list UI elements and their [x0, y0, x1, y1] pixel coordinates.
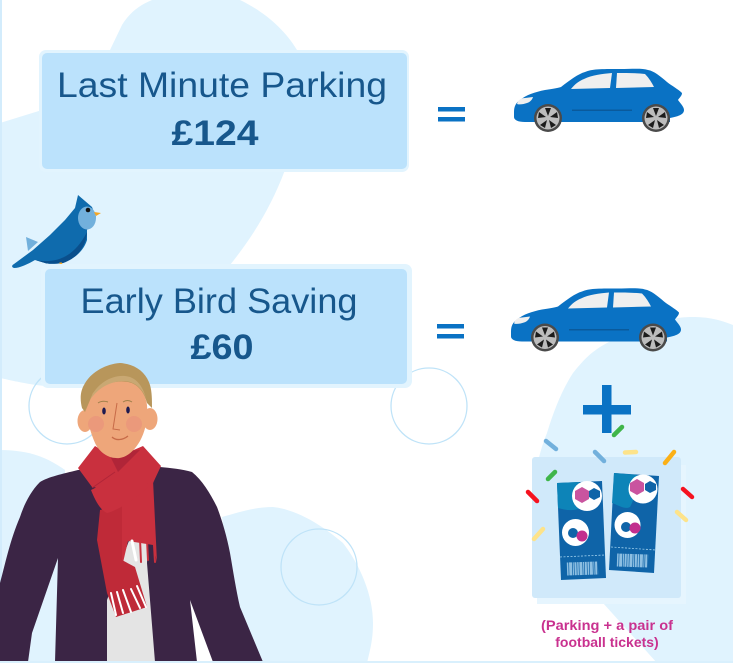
scarf lower fold [91, 465, 160, 513]
face [85, 379, 147, 458]
value: £124: £124 [172, 114, 259, 153]
icon: car 2 [511, 288, 681, 352]
equals sign 1 [438, 107, 465, 122]
scarf fringe [111, 539, 155, 615]
ticket right [609, 473, 659, 573]
caption: football tickets) [555, 634, 659, 650]
eyes and mouth [102, 408, 106, 414]
panel: last minute parking [39, 50, 409, 172]
caption: (Parking + a pair of [541, 617, 673, 633]
scarf left tail [97, 505, 147, 617]
icon: bird [12, 195, 101, 268]
equals sign 2 [437, 324, 464, 338]
heading: last minute parking: Last Minute Parking [57, 66, 387, 105]
heading: early bird saving: Early Bird Saving [80, 282, 358, 321]
value: £60: £60 [190, 328, 254, 367]
illustration: man with scarf [0, 363, 263, 662]
ticket left [557, 481, 606, 580]
panel: early bird saving [41, 264, 412, 388]
shirt [107, 538, 155, 662]
cheeks [88, 416, 104, 432]
scarf right tail [122, 480, 157, 567]
decorative ring circles [29, 368, 467, 605]
confetti [528, 427, 692, 539]
icon: plus [583, 385, 631, 433]
ears [78, 410, 92, 432]
scarf upper band [78, 446, 161, 488]
panel: tickets card [532, 457, 686, 604]
eyebrows [98, 400, 132, 403]
icon: car 1 [514, 69, 684, 132]
caption [541, 617, 673, 650]
hair [81, 363, 152, 412]
jacket [0, 467, 263, 662]
bottom edge strip [0, 661, 733, 663]
